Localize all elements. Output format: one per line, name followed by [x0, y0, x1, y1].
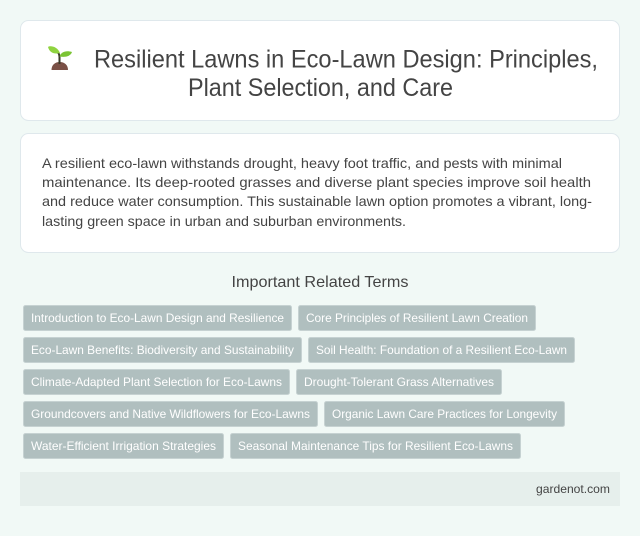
- heading: Plant Selection, and Care: [188, 74, 453, 102]
- panel: description text: lasting green space in urban and suburban environments.: [42, 213, 406, 229]
- tag: soil health: [308, 338, 574, 362]
- panel: description text: A resilient eco-lawn withstands drought, heavy foot traffic, and pests with minimal: [42, 155, 562, 171]
- footer bar: [20, 472, 620, 506]
- tag: drought-tolerant: Drought-Tolerant Grass Alternatives: [304, 375, 494, 389]
- tag: organic care: Organic Lawn Care Practices for Longevity: [332, 407, 557, 421]
- tag: irrigation: Water-Efficient Irrigation Strategies: [31, 439, 216, 453]
- tag: introduction: [24, 306, 292, 330]
- tag: soil health: Soil Health: Foundation of a Resilient Eco-Lawn: [316, 343, 567, 357]
- heading: Resilient Lawns in Eco-Lawn Design: Principles,: [94, 46, 598, 74]
- tag: irrigation: [24, 434, 224, 458]
- tag: seasonal maintenance: [230, 434, 520, 458]
- tag: seasonal maintenance: Seasonal Maintenance Tips for Resilient Eco-Lawns: [238, 439, 513, 453]
- tag: introduction: Introduction to Eco-Lawn Design and Resilience: [31, 311, 284, 325]
- tag: climate-adapted plants: [24, 370, 290, 394]
- panel: description text: and reduce water consumption. This sustainable lawn option promotes a vibrant, long-: [42, 193, 592, 209]
- panel: description text: maintenance. Its deep-rooted grasses and diverse plant species improve soil health: [42, 174, 591, 190]
- section heading: related terms: Important Related Terms: [232, 274, 408, 291]
- tag: groundcovers: [24, 402, 318, 426]
- tag: core principles: Core Principles of Resilient Lawn Creation: [306, 311, 528, 325]
- heading: [94, 46, 598, 102]
- panel: title card: [20, 20, 620, 120]
- tag: organic care: [324, 402, 564, 426]
- panel: description text: [20, 134, 620, 252]
- tag: core principles: [298, 306, 536, 330]
- tag: groundcovers: Groundcovers and Native Wildflowers for Eco-Lawns: [31, 407, 310, 421]
- footer bar: gardenot.com: [536, 482, 610, 496]
- tag: climate-adapted plants: Climate-Adapted Plant Selection for Eco-Lawns: [31, 375, 282, 389]
- icon: seedling: [48, 46, 72, 70]
- tag: drought-tolerant: [296, 370, 502, 394]
- tag: benefits: Eco-Lawn Benefits: Biodiversity and Sustainability: [31, 343, 294, 357]
- tag: benefits: [24, 338, 302, 362]
